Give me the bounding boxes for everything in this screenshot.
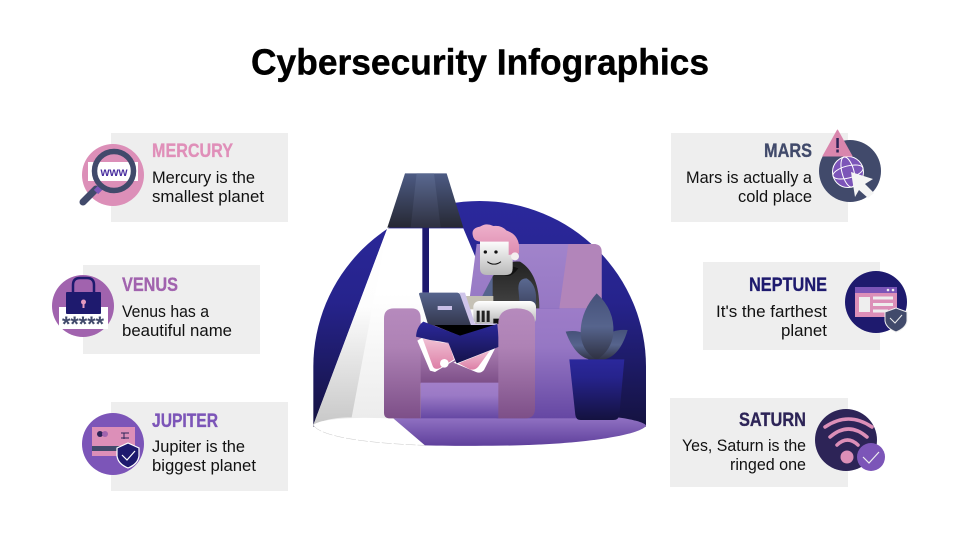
mercury text: smallest planet: [152, 187, 264, 206]
icon: browser window with shield: [845, 271, 907, 333]
venus text: [122, 302, 232, 340]
jupiter heading: JUPITER: [152, 411, 218, 432]
card background: [111, 133, 288, 222]
grey paper and white device: [463, 296, 493, 309]
card background: [111, 402, 288, 491]
card background: [703, 262, 880, 350]
panel: venus: [52, 265, 260, 354]
panel: mercury: [82, 133, 288, 222]
neptune text: It's the farthest: [716, 302, 827, 321]
saturn text: ringed one: [730, 455, 806, 474]
neptune heading: NEPTUNE: [749, 275, 827, 296]
icon: padlock with password: *****: [62, 312, 105, 336]
central illustration: person on armchair: [313, 173, 646, 446]
saturn heading: SATURN: [739, 410, 806, 431]
pink shoes: [417, 337, 455, 372]
neptune text: planet: [781, 321, 827, 340]
saturn text: [682, 436, 806, 474]
mars text: Mars is actually a: [686, 168, 813, 187]
armchair: [384, 244, 602, 418]
jupiter text: [152, 437, 256, 475]
face: [480, 240, 513, 275]
lamp light beam: [313, 228, 477, 445]
dark blue dome background: [313, 201, 646, 427]
icon: magnifier over www: [82, 144, 144, 206]
mercury text: Mercury is the: [152, 168, 255, 187]
jupiter text: biggest planet: [152, 456, 256, 475]
mars text: cold place: [738, 187, 812, 206]
mars text: [686, 168, 813, 206]
icon: magnifier over www: www: [99, 167, 128, 179]
card background: [671, 133, 848, 222]
icon: globe with cursor and warning: [819, 130, 881, 202]
icon: credit card with shield: [82, 413, 144, 475]
icon: padlock with password: [52, 275, 114, 337]
lamp: [387, 173, 463, 293]
torso and arms: [482, 275, 493, 298]
armchair right arm: [498, 308, 535, 418]
venus text: beautiful name: [122, 321, 232, 340]
panel: saturn: [670, 398, 885, 487]
panel: neptune: [703, 262, 907, 350]
title: Cybersecurity Infographics: [251, 42, 709, 82]
card background: [670, 398, 848, 487]
card background: [83, 265, 260, 354]
venus heading: VENUS: [122, 275, 178, 296]
crossed legs: [416, 322, 499, 363]
hair: [472, 224, 519, 255]
panel: jupiter: [82, 402, 288, 491]
mercury heading: MERCURY: [152, 141, 233, 162]
jupiter text: Jupiter is the: [152, 437, 245, 456]
saturn text: Yes, Saturn is the: [682, 436, 806, 455]
neptune text: [716, 302, 827, 340]
laptop: [459, 293, 497, 326]
potted plant: [566, 293, 628, 420]
venus text: Venus has a: [122, 302, 210, 321]
person: [416, 224, 539, 373]
mars heading: MARS: [764, 141, 812, 162]
icon: wifi with check badge: [815, 409, 885, 471]
panel: mars: [671, 130, 881, 222]
rug: [393, 417, 646, 446]
mercury text: [152, 168, 264, 206]
